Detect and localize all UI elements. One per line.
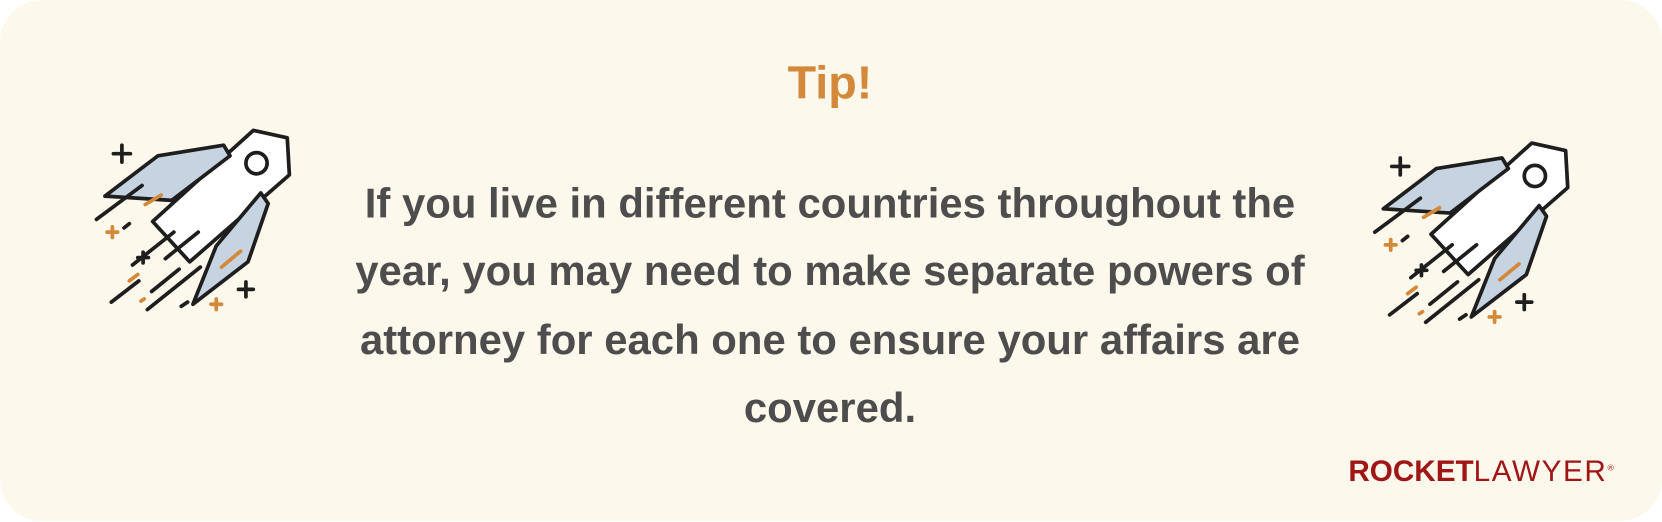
logo: ROCKETLAWYER®	[1348, 455, 1614, 488]
title: Tip!	[788, 57, 872, 109]
body text: If you live in different countries throughout the year, you may need to make separate powers of attorney for each one to ensure your affairs are covered.	[355, 180, 1305, 431]
